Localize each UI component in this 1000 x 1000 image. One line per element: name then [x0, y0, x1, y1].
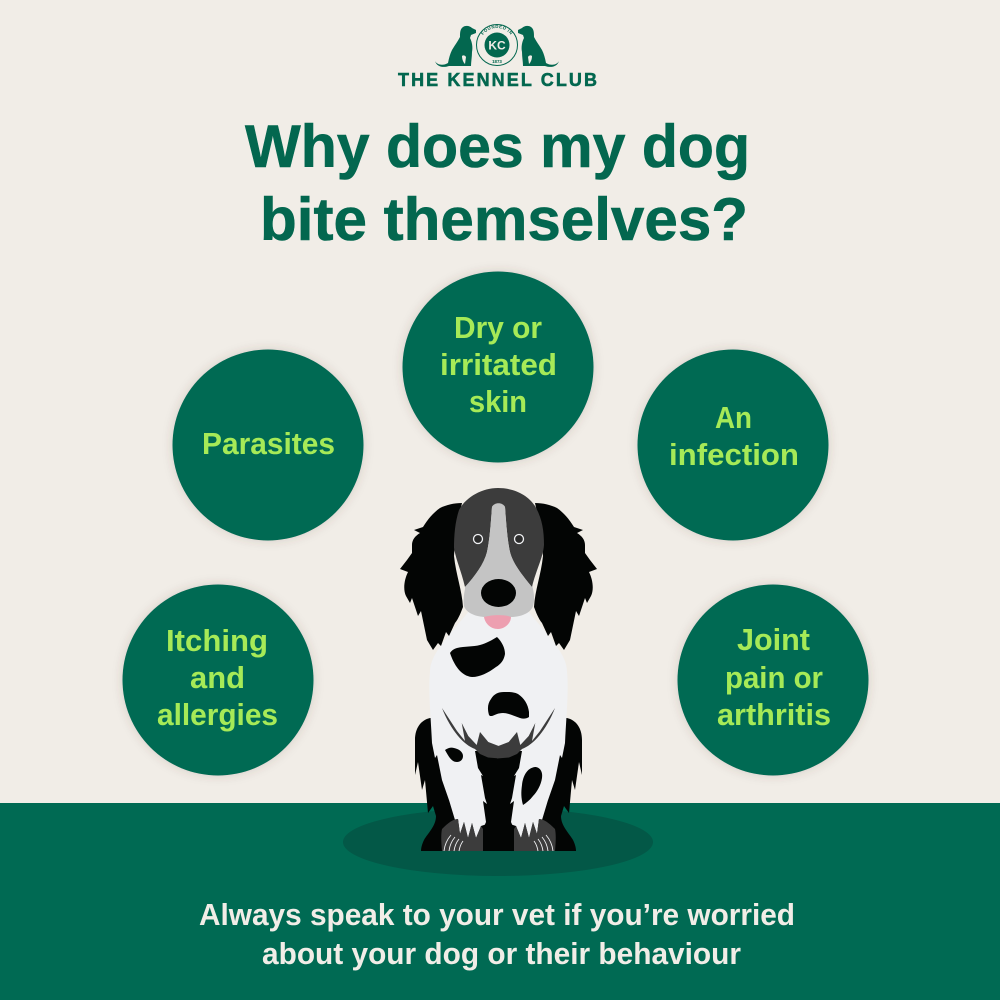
panel: itching and allergies: and: [190, 660, 245, 695]
chest patch: [450, 637, 505, 677]
icon: founded roundel: KC: [488, 38, 506, 52]
icon: founded roundel: [476, 24, 518, 66]
dog ground shadow: [343, 808, 653, 876]
panel: joint pain or arthritis: pain or: [725, 660, 823, 695]
tongue: [484, 615, 511, 629]
right eye: [514, 534, 524, 544]
icon: founded roundel: 1873: [492, 59, 502, 64]
nose: [481, 579, 516, 607]
icon: founded roundel: FOUNDED IN: [481, 25, 513, 35]
panel: dry or irritated skin: irritated: [440, 347, 557, 382]
panel: joint pain or arthritis: Joint: [737, 622, 810, 657]
panel: an infection: infection: [669, 437, 799, 472]
panel: an infection: An: [715, 400, 752, 435]
belly patch: [488, 692, 529, 719]
title: Why does my dog: [245, 113, 750, 180]
leg patch left: [445, 748, 463, 762]
head markings: [454, 488, 544, 587]
footer message: [199, 897, 795, 971]
panel: an infection: [638, 350, 828, 540]
logo wordmark: THE KENNEL CLUB: [398, 70, 597, 90]
panel: dry or irritated skin: Dry or: [454, 310, 542, 345]
illustration: spaniel dog: [400, 488, 597, 851]
panel: dry or irritated skin: skin: [469, 384, 527, 419]
title: bite themselves?: [260, 186, 748, 253]
left eye: [474, 534, 482, 544]
icon: right seated dog: [518, 26, 559, 67]
panel: itching and allergies: allergies: [157, 697, 278, 732]
green floor band: [0, 803, 1000, 1000]
face blaze: [465, 503, 532, 600]
panel: joint pain or arthritis: arthritis: [717, 697, 831, 732]
footer message: about your dog or their behaviour: [262, 936, 741, 971]
panel: parasites: Parasites: [202, 426, 335, 461]
logo: The Kennel Club: [398, 24, 597, 90]
panel: dry or irritated skin: [402, 272, 594, 462]
muzzle: [464, 565, 534, 617]
footer message: Always speak to your vet if you’re worried: [199, 897, 795, 932]
panel: parasites: [172, 350, 364, 540]
leg patch right: [521, 767, 542, 805]
left ear: [400, 503, 463, 650]
right ear: [534, 503, 597, 650]
icon: left seated dog: [435, 26, 476, 67]
panel: joint pain or arthritis: [678, 584, 868, 776]
title: [245, 113, 750, 253]
panel: itching and allergies: [122, 584, 314, 776]
panel: itching and allergies: Itching: [166, 623, 268, 658]
